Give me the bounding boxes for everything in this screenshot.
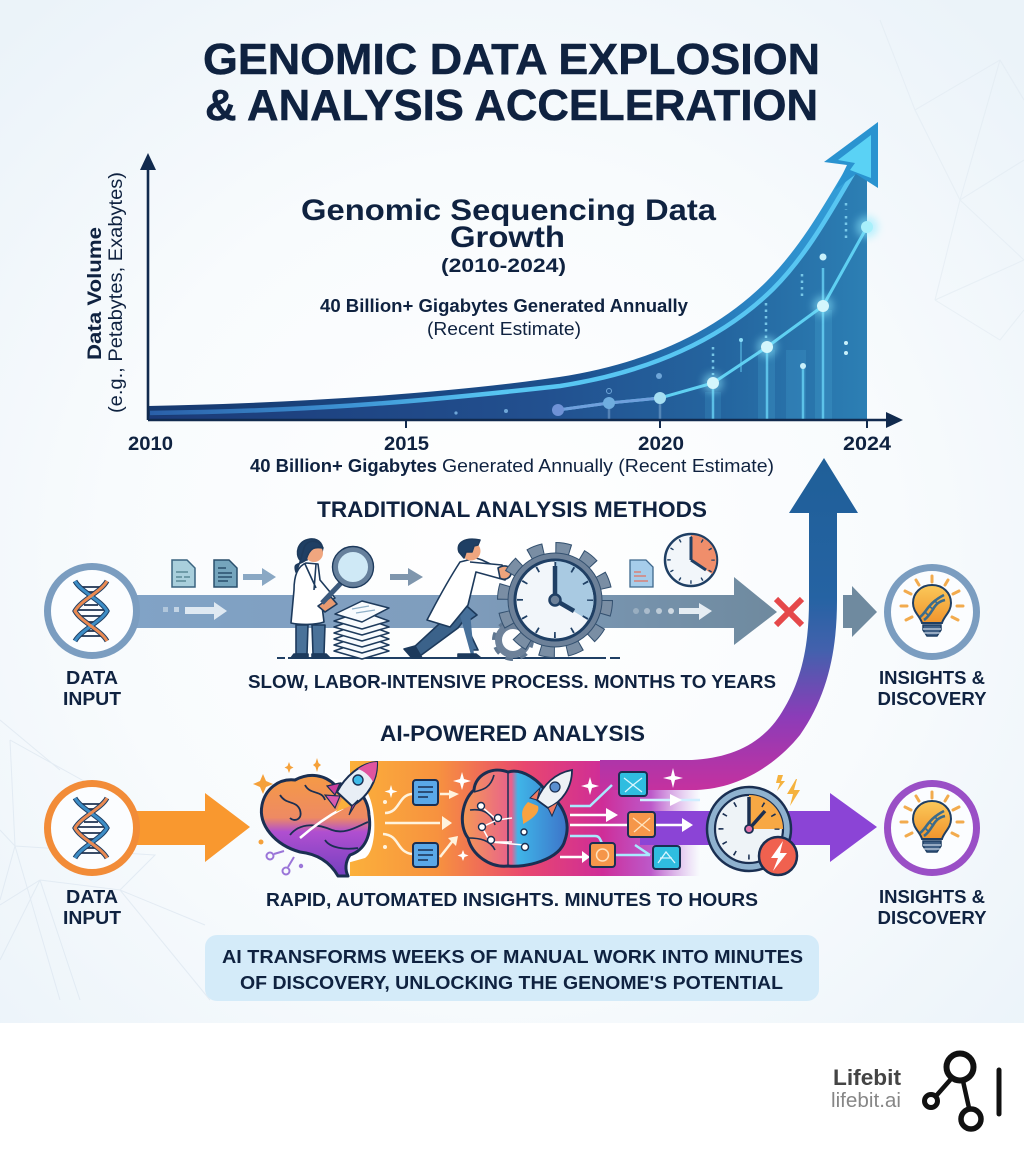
chart caption <box>250 456 774 476</box>
arrow motion marks right <box>633 603 712 620</box>
icon: engineer pushing gear <box>404 539 511 658</box>
data tile: hexagon orange <box>590 843 615 867</box>
title <box>203 35 820 130</box>
data tile: network orange <box>628 812 655 837</box>
growth curve highlight <box>150 172 854 413</box>
traditional arrow <box>130 577 777 645</box>
chart title second line: Growth <box>450 221 565 254</box>
x tick label 2015: 2015 <box>384 434 429 455</box>
data input line 2: INPUT <box>63 689 121 709</box>
insights line 1: INSIGHTS & <box>879 887 985 907</box>
brand: Lifebit <box>831 1054 999 1129</box>
icon: lightning badge <box>759 837 797 875</box>
brand url: lifebit.ai <box>831 1090 901 1112</box>
data input line 2: INPUT <box>63 908 121 928</box>
icon: brain with rocket <box>261 762 377 876</box>
icon: scientist with magnifier <box>291 539 374 658</box>
doc tile bottom <box>413 843 438 867</box>
x axis <box>148 412 903 428</box>
label: data input <box>63 668 121 709</box>
callout <box>205 935 819 1001</box>
big curved arrow: acceleration <box>600 458 858 790</box>
orange input arrow <box>130 793 250 862</box>
icon: document <box>630 560 653 587</box>
data tile: network cyan <box>619 772 647 796</box>
x tick label 2020: 2020 <box>638 434 684 455</box>
AI gradient band <box>350 761 700 876</box>
arrow motion marks <box>163 602 227 620</box>
panel: traditional flow <box>48 534 986 709</box>
glowing data bars <box>454 203 848 420</box>
label: data input <box>63 887 121 928</box>
arrow: scientist to engineer <box>390 568 423 586</box>
icon: red cross <box>776 599 802 625</box>
insights line 1: INSIGHTS & <box>879 668 985 688</box>
flow streams right <box>560 785 700 863</box>
icon: paper stack <box>334 601 389 659</box>
background network pattern, top right <box>880 20 1024 340</box>
flow streams left <box>383 790 459 857</box>
icon: data input DNA <box>48 566 136 656</box>
title line 2: & ANALYSIS ACCELERATION <box>205 81 818 130</box>
y axis <box>140 153 156 420</box>
growth curve band <box>148 168 852 411</box>
icon: insights lightbulb purple <box>888 784 976 872</box>
sparkles <box>383 768 683 861</box>
icon: split brain with rocket <box>462 770 572 866</box>
icon: fast clock <box>707 787 791 871</box>
icon: documents <box>172 560 237 587</box>
caption bold part: 40 Billion+ Gigabytes <box>250 456 437 476</box>
x tick label 2010: 2010 <box>128 434 173 455</box>
data input line 1: DATA <box>66 887 118 907</box>
brand name: Lifebit <box>833 1065 902 1090</box>
chart: genomic data growth <box>85 122 903 476</box>
panel: AI flow <box>48 458 986 928</box>
label: insights <box>878 668 986 709</box>
y axis label: units: (e.g., Petabytes, Exabytes) <box>106 172 127 413</box>
doc tile top <box>413 780 438 805</box>
caption regular part: Generated Annually (Recent Estimate) <box>442 456 774 476</box>
purple arrow to insights <box>640 793 877 862</box>
data trend line with points <box>552 216 878 416</box>
icon: gear with clock <box>504 549 606 651</box>
AI caption: RAPID, AUTOMATED INSIGHTS. MINUTES TO HOURS <box>266 890 758 910</box>
icon: small gear <box>496 623 530 657</box>
heading: AI analysis: AI-POWERED ANALYSIS <box>380 721 645 746</box>
brand logo <box>924 1054 999 1129</box>
chart stat note: (Recent Estimate) <box>427 319 581 339</box>
heading: traditional analysis: TRADITIONAL ANALYSIS METHODS <box>317 497 707 522</box>
icon: data input DNA orange <box>48 784 136 872</box>
ground line <box>277 657 620 659</box>
icon: sparks <box>776 775 800 806</box>
callout line 1: AI TRANSFORMS WEEKS OF MANUAL WORK INTO MINUTES <box>222 947 803 967</box>
arrow: documents to scientist <box>243 568 276 586</box>
callout box <box>205 935 819 1001</box>
traditional caption: SLOW, LABOR-INTENSIVE PROCESS. MONTHS TO YEARS <box>248 672 776 692</box>
icon: stopwatch <box>665 534 717 586</box>
y axis label: primary: Data Volume <box>85 227 106 360</box>
footer band <box>0 1023 1024 1154</box>
area under growth curve <box>148 168 867 420</box>
sparkles: brain <box>253 758 321 844</box>
chart stat headline: 40 Billion+ Gigabytes Generated Annually <box>320 296 688 316</box>
growth curve arrowhead <box>824 122 878 190</box>
icon: insights lightbulb <box>888 568 976 656</box>
x tick label 2024: 2024 <box>843 434 891 455</box>
chart date range: (2010-2024) <box>441 256 566 277</box>
data input line 1: DATA <box>66 668 118 688</box>
data tile: network cyan low <box>653 846 680 869</box>
label: insights <box>878 887 986 928</box>
chart title: Genomic Sequencing Data <box>301 194 716 227</box>
decorative molecule marks <box>266 851 302 874</box>
insights line 2: DISCOVERY <box>878 689 986 709</box>
background network pattern, bottom left <box>0 720 210 1000</box>
title line 1: GENOMIC DATA EXPLOSION <box>203 35 820 84</box>
callout line 2: OF DISCOVERY, UNLOCKING THE GENOME'S POTENTIAL <box>240 973 783 993</box>
insights line 2: DISCOVERY <box>878 908 986 928</box>
short arrow to insights <box>843 586 877 637</box>
